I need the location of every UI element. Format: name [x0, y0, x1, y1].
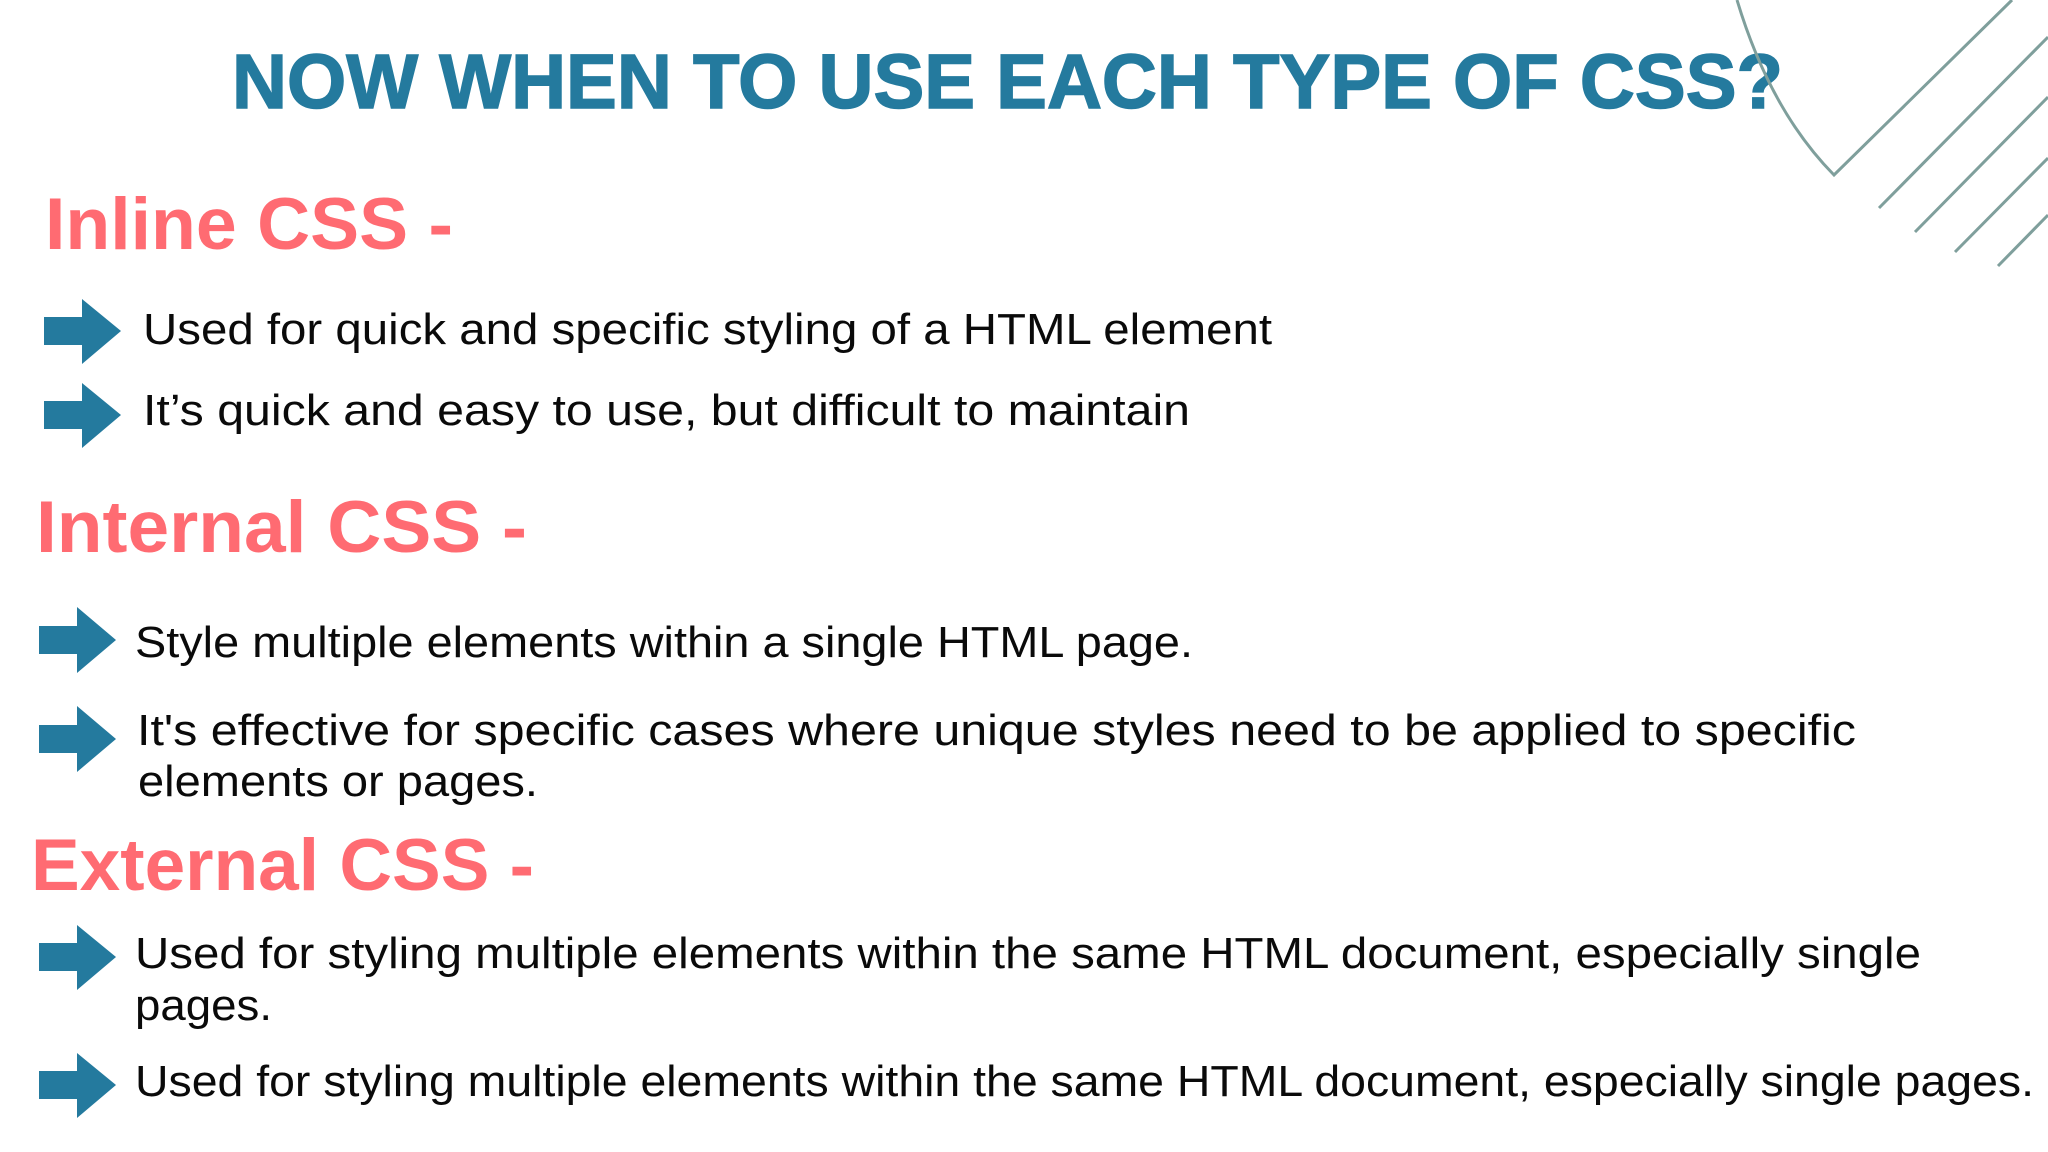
text: inline point 1: Used for quick and specific styling of a HTML element [143, 305, 1272, 354]
text: external point 2: Used for styling multiple elements within the same HTML document, especially single pages. [135, 1057, 2034, 1106]
panel: external CSS [31, 825, 2034, 1118]
text: internal point 1: Style multiple elements within a single HTML page. [135, 618, 1193, 667]
text: external point 1: pages. [135, 981, 272, 1030]
text: internal point 2: elements or pages. [138, 757, 538, 806]
heading: internal CSS: Internal CSS - [36, 487, 527, 568]
arrow: inline point 2 [44, 383, 121, 448]
arrow: external point 1 [39, 925, 116, 990]
arrow: internal point 2 [39, 706, 116, 772]
heading: inline CSS: Inline CSS - [45, 184, 453, 265]
corner decoration: shield outline and diagonal lines [1737, 0, 2048, 266]
text: inline point 2: It’s quick and easy to use, but difficult to maintain [143, 386, 1190, 435]
arrow: external point 2 [39, 1053, 116, 1118]
arrow: internal point 1 [39, 607, 116, 673]
text: internal point 2 [137, 706, 1856, 806]
panel: inline CSS [44, 184, 1272, 448]
text: external point 1: Used for styling multiple elements within the same HTML document, especially single [135, 929, 1921, 978]
text: external point 1 [135, 929, 1921, 1030]
panel: internal CSS [36, 487, 1856, 806]
text: internal point 2: It's effective for specific cases where unique styles need to be applied to specific [137, 706, 1856, 755]
heading: external CSS: External CSS - [31, 825, 534, 906]
title: NOW WHEN TO USE EACH TYPE OF CSS? [232, 39, 1783, 125]
arrow: inline point 1 [44, 299, 121, 364]
